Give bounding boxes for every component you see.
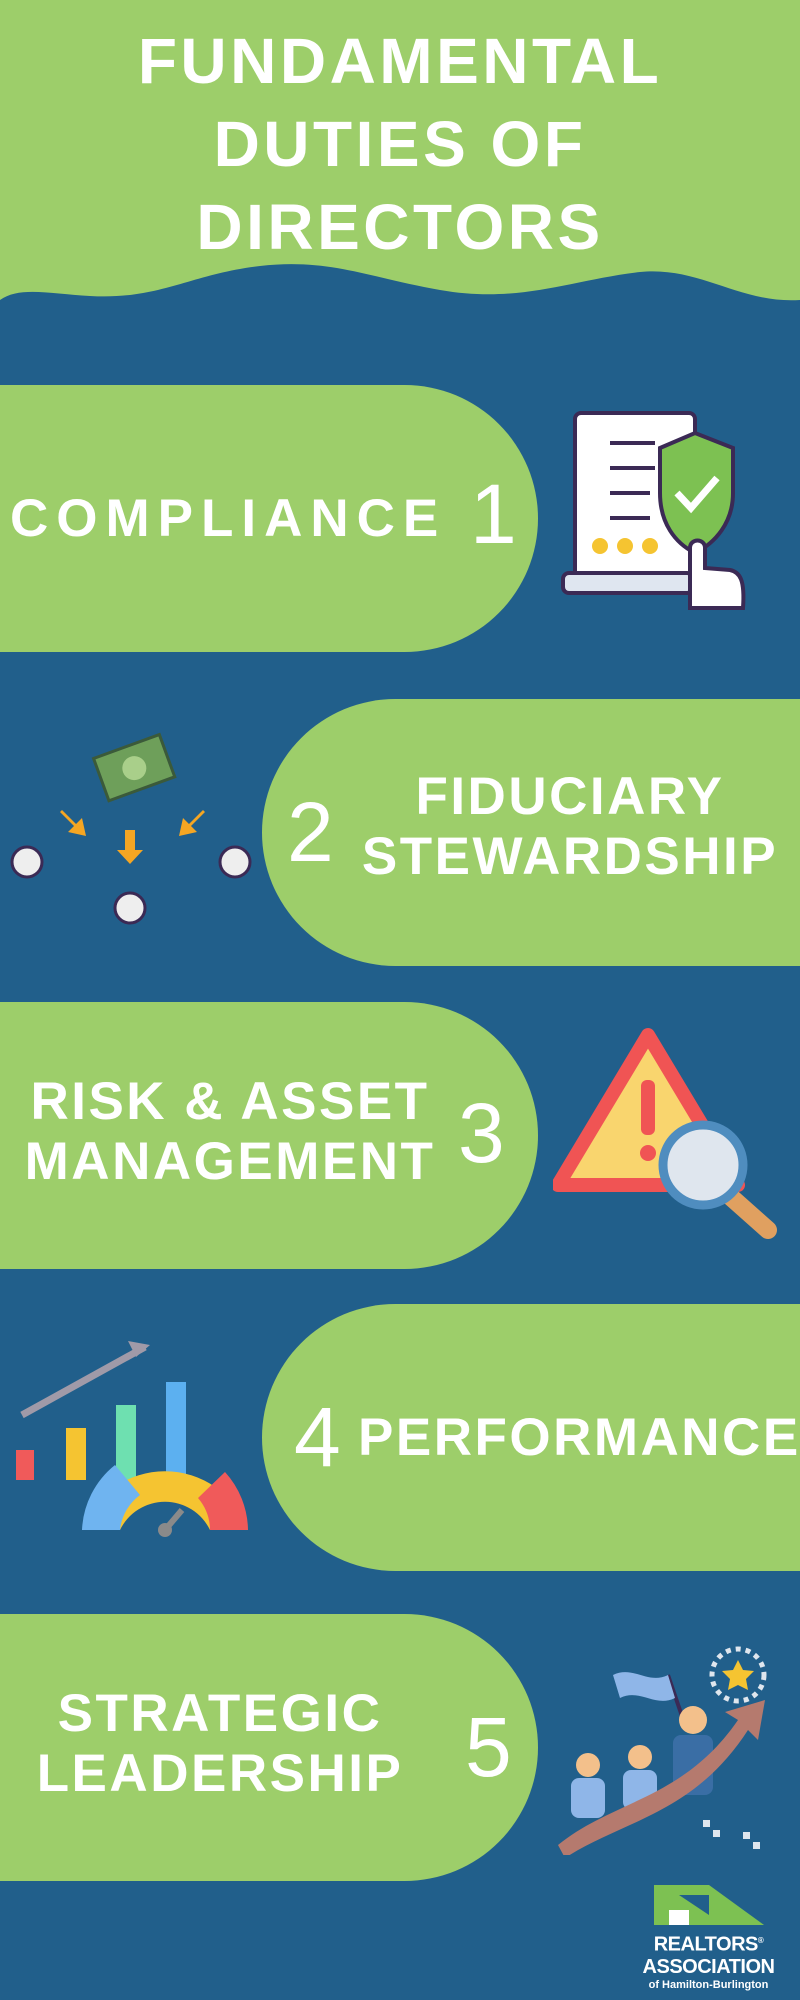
number 4: 4 [294, 1390, 341, 1484]
number 5: 5 [465, 1700, 512, 1794]
icon: leadership growth [558, 1646, 766, 1855]
heading: risk & asset management: MANAGEMENT [25, 1132, 435, 1191]
panel: strategic leadership [0, 1614, 538, 1881]
number 1: 1 [470, 467, 517, 561]
heading: fiduciary stewardship [362, 767, 778, 886]
icon: warning with magnifier [553, 1028, 777, 1239]
heading: fiduciary stewardship: FIDUCIARY [415, 767, 725, 826]
number 2: 2 [287, 785, 334, 879]
panel: fiduciary stewardship [262, 699, 800, 966]
title [138, 25, 662, 263]
heading: fiduciary stewardship: STEWARDSHIP [362, 827, 778, 886]
panel: risk & asset management [0, 1002, 538, 1269]
title: FUNDAMENTAL [138, 25, 662, 97]
heading: compliance: COMPLIANCE [10, 489, 446, 548]
heading: strategic leadership: STRATEGIC [58, 1684, 382, 1743]
logo: realtors association: ASSOCIATION [643, 1956, 774, 1978]
icon: money distribution [10, 732, 252, 924]
panel: performance [262, 1304, 800, 1571]
icon: chart gauge [16, 1341, 248, 1537]
heading: performance: PERFORMANCE [358, 1408, 800, 1467]
heading: strategic leadership [37, 1684, 403, 1803]
number 3: 3 [458, 1086, 505, 1180]
icon: checklist shield [561, 411, 746, 610]
panel: compliance [0, 385, 538, 652]
heading: risk & asset management [25, 1072, 435, 1191]
logo: realtors association [643, 1885, 774, 1991]
heading: risk & asset management: RISK & ASSET [30, 1072, 430, 1131]
title: DIRECTORS [196, 191, 604, 263]
title: DUTIES OF [214, 108, 586, 180]
logo: realtors association: of Hamilton-Burlington [649, 1979, 768, 1991]
logo: realtors association: REALTORS® [654, 1934, 763, 1956]
heading: strategic leadership: LEADERSHIP [37, 1744, 403, 1803]
header banner [0, 0, 800, 300]
